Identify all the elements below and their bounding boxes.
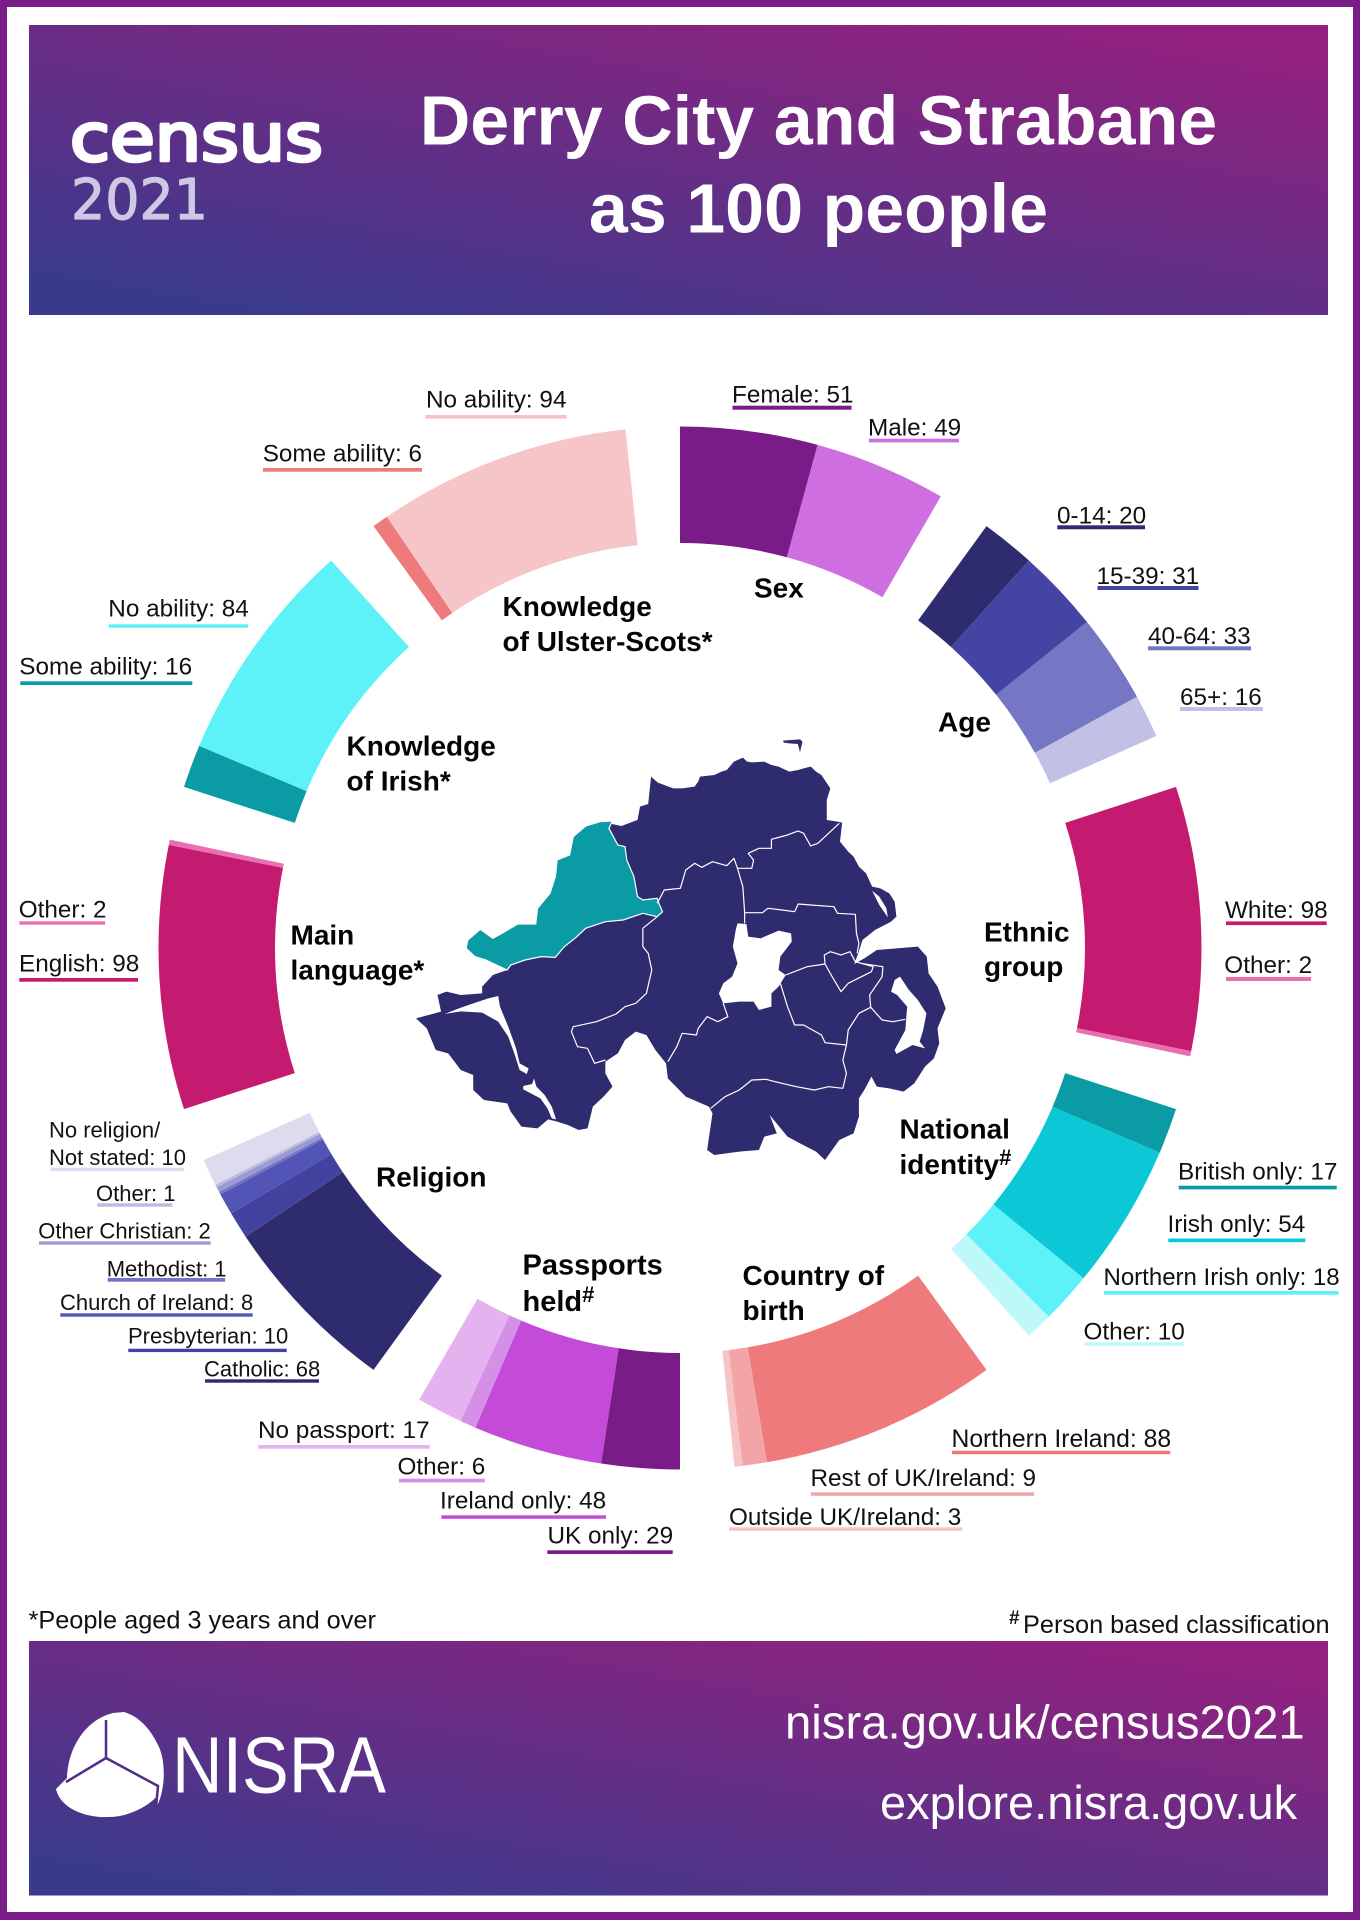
label: Methodist 1: Methodist: 1 [107,1256,227,1282]
heading: Ethnic group: Ethnic [984,916,1070,948]
slice: British only 17 [1052,1073,1176,1153]
logo: NISRA: NISRA [172,1720,387,1810]
label: Rest of UK/Ireland 9: Rest of UK/Ireland: 9 [810,1465,1036,1492]
link: nisra.gov.uk/census2021: nisra.gov.uk/census2021 [785,1696,1305,1750]
slice: 40-64 [996,622,1137,753]
label: Ulster-Scots Some ability 6: Some ability: 6 [263,440,422,468]
label: Northern Ireland 88: Northern Ireland: 88 [952,1426,1171,1453]
footnote: person based classification: # [1009,1608,1020,1629]
label: Irish Some ability 16: Some ability: 16 [19,654,192,680]
header banner [29,25,1328,315]
ring segment: Religion [204,1113,442,1370]
heading: National identity: National [900,1114,1010,1144]
slice: Other Christian 2 [217,1134,322,1192]
slice: English 98 [159,845,295,1109]
map: district boundaries [571,823,905,1108]
heading: Knowledge of Ulster-Scots: Knowledge [502,591,652,622]
slice: Rest of UK/Ireland 9 [729,1347,767,1466]
label: White 98: White: 98 [1225,897,1328,924]
slice: UK only 29 [601,1348,680,1470]
ring segment: Main language [159,840,295,1109]
heading: National identity: identity [900,1149,999,1180]
slice: Female 51 [680,426,818,557]
slice: Other 6 [460,1315,521,1428]
ring segment: National identity [951,1073,1176,1336]
map: Upper Lough Erne [523,1078,556,1119]
slice: 15-39 [951,560,1087,695]
link: explore.nisra.gov.uk: explore.nisra.gov.uk [880,1776,1298,1829]
label: No passport 17: No passport: 17 [258,1417,430,1444]
slice: Northern Ireland 88 [748,1276,986,1462]
icon: NISRA emblem [56,1712,164,1817]
map: land outline [416,758,946,1160]
slice: No ability 94 [387,429,638,613]
slice: 0-14 [918,526,1029,647]
label: Catholic 68: Catholic: 68 [204,1356,320,1382]
map: Northern Ireland with Derry City and Strabane highlighted [416,739,946,1160]
label: No religion / Not stated 10: Not stated: 10 [49,1145,186,1170]
label: Female 51: Female: 51 [732,382,854,408]
slice: Methodist 1 [219,1138,323,1194]
label: National Other 10: Other: 10 [1084,1318,1185,1346]
ring segment: Knowledge of Ulster-Scots [374,429,638,620]
slice: Other 2 [1076,1028,1191,1056]
heading: Ethnic group: group [984,951,1063,982]
slice: No religion 10 [204,1113,319,1185]
map: Strangford Lough [891,977,926,1054]
label: 15-39 31: 15-39: 31 [1096,563,1199,590]
slice: Other 10 [951,1234,1049,1336]
footnote: person based classification: Person based classification [1023,1611,1330,1639]
label: Irish only 54: Irish only: 54 [1168,1211,1305,1238]
label: Church of Ireland 8: Church of Ireland: 8 [60,1290,253,1315]
label: Male 49: Male: 49 [868,414,961,442]
slice: Outside UK/Ireland 3 [722,1350,743,1467]
label: Ulster-Scots No ability 94: No ability: 94 [426,386,566,414]
slice: Other 2 [169,840,284,868]
title: as 100 people [589,170,1048,248]
label: 65+ 16: 65+: 16 [1180,684,1262,711]
slice: Male 49 [787,445,941,597]
label: Religion Other 1: Other: 1 [96,1181,175,1206]
heading: National identity: # [999,1145,1011,1170]
ring segment: Sex [680,426,941,597]
logo: census 2021: census [70,100,323,176]
label: No religion / Not stated 10 [49,1118,186,1171]
map: Lower Lough Erne [445,996,529,1074]
label: Language Other 2: Other: 2 [19,896,106,924]
label: 40-64 33: 40-64: 33 [1148,623,1251,650]
label: Ireland only 48: Ireland only: 48 [440,1488,606,1514]
logo: census 2021: 2021 [71,168,208,233]
ring segment: Passports held [419,1299,680,1470]
map: Rathlin Island [783,739,802,752]
slice: Church of Ireland 8 [220,1139,331,1213]
slice: Irish only 54 [993,1107,1160,1278]
ring segment: Ethnic group [1065,787,1201,1056]
heading: Country of birth: birth [742,1295,805,1326]
map: Lough Neagh [719,923,792,1010]
title [420,82,1217,248]
title: Derry City and Strabane [420,82,1217,160]
logo: NISRA [56,1712,387,1817]
heading: Knowledge of Irish: of Irish* [346,766,451,796]
label: Ethnic Other 2: Other: 2 [1224,952,1312,979]
heading: Knowledge of Ulster-Scots: of Ulster-Scots* [502,626,713,657]
label: Irish No ability 84: No ability: 84 [108,596,249,622]
slice: White 98 [1065,787,1201,1051]
slice: Presbyterian 10 [231,1154,343,1237]
label: Outside UK/Ireland 3: Outside UK/Ireland: 3 [729,1504,961,1531]
footnote: people aged 3 years and over: *People aged 3 years and over [28,1606,376,1634]
label: British only 17: British only: 17 [1178,1158,1337,1186]
slice: No passport 17 [419,1299,510,1421]
label: Other Christian 2: Other Christian: 2 [38,1218,211,1244]
label: English 98: English: 98 [19,950,139,978]
heading: Age: Age [938,706,991,738]
slice: No ability 84 [199,560,409,791]
heading: Religion: Religion [376,1162,486,1192]
heading: Passports held: Passports [522,1250,663,1282]
slice: 65+ [1035,697,1156,783]
label: 0-14 20: 0-14: 20 [1057,502,1146,530]
slice: Ireland only 48 [475,1320,619,1464]
footer banner [29,1641,1328,1896]
slice: Northern Irish only 18 [966,1204,1084,1317]
label: No religion / Not stated 10: No religion/ [49,1118,160,1142]
logo: census 2021 [70,100,323,233]
slice: Other 1 [215,1132,320,1187]
label: Presbyterian 10: Presbyterian: 10 [128,1324,288,1348]
ring segment: Age [918,526,1156,783]
label: Passport Other 6: Other: 6 [398,1454,485,1480]
slice: Catholic 68 [246,1172,442,1370]
heading: Knowledge of Irish: Knowledge [346,730,496,762]
map: Larne Lough [872,891,888,917]
heading: Main language: Main [290,920,354,950]
heading: Passports held: # [582,1282,594,1307]
slice: Some ability 6 [374,517,452,620]
map: Derry City and Strabane district [466,821,662,970]
label: UK only 29: UK only: 29 [548,1522,673,1550]
slice: Some ability 16 [184,746,307,823]
heading: Country of birth: Country of [742,1260,884,1291]
ring segment: Knowledge of Irish [184,560,409,823]
heading: Passports held: held [522,1286,582,1318]
heading: Main language: language* [290,954,424,986]
label: Northern Irish only 18: Northern Irish only: 18 [1104,1264,1340,1291]
heading: Sex: Sex [754,572,804,604]
ring segment: Country of birth [722,1276,986,1467]
